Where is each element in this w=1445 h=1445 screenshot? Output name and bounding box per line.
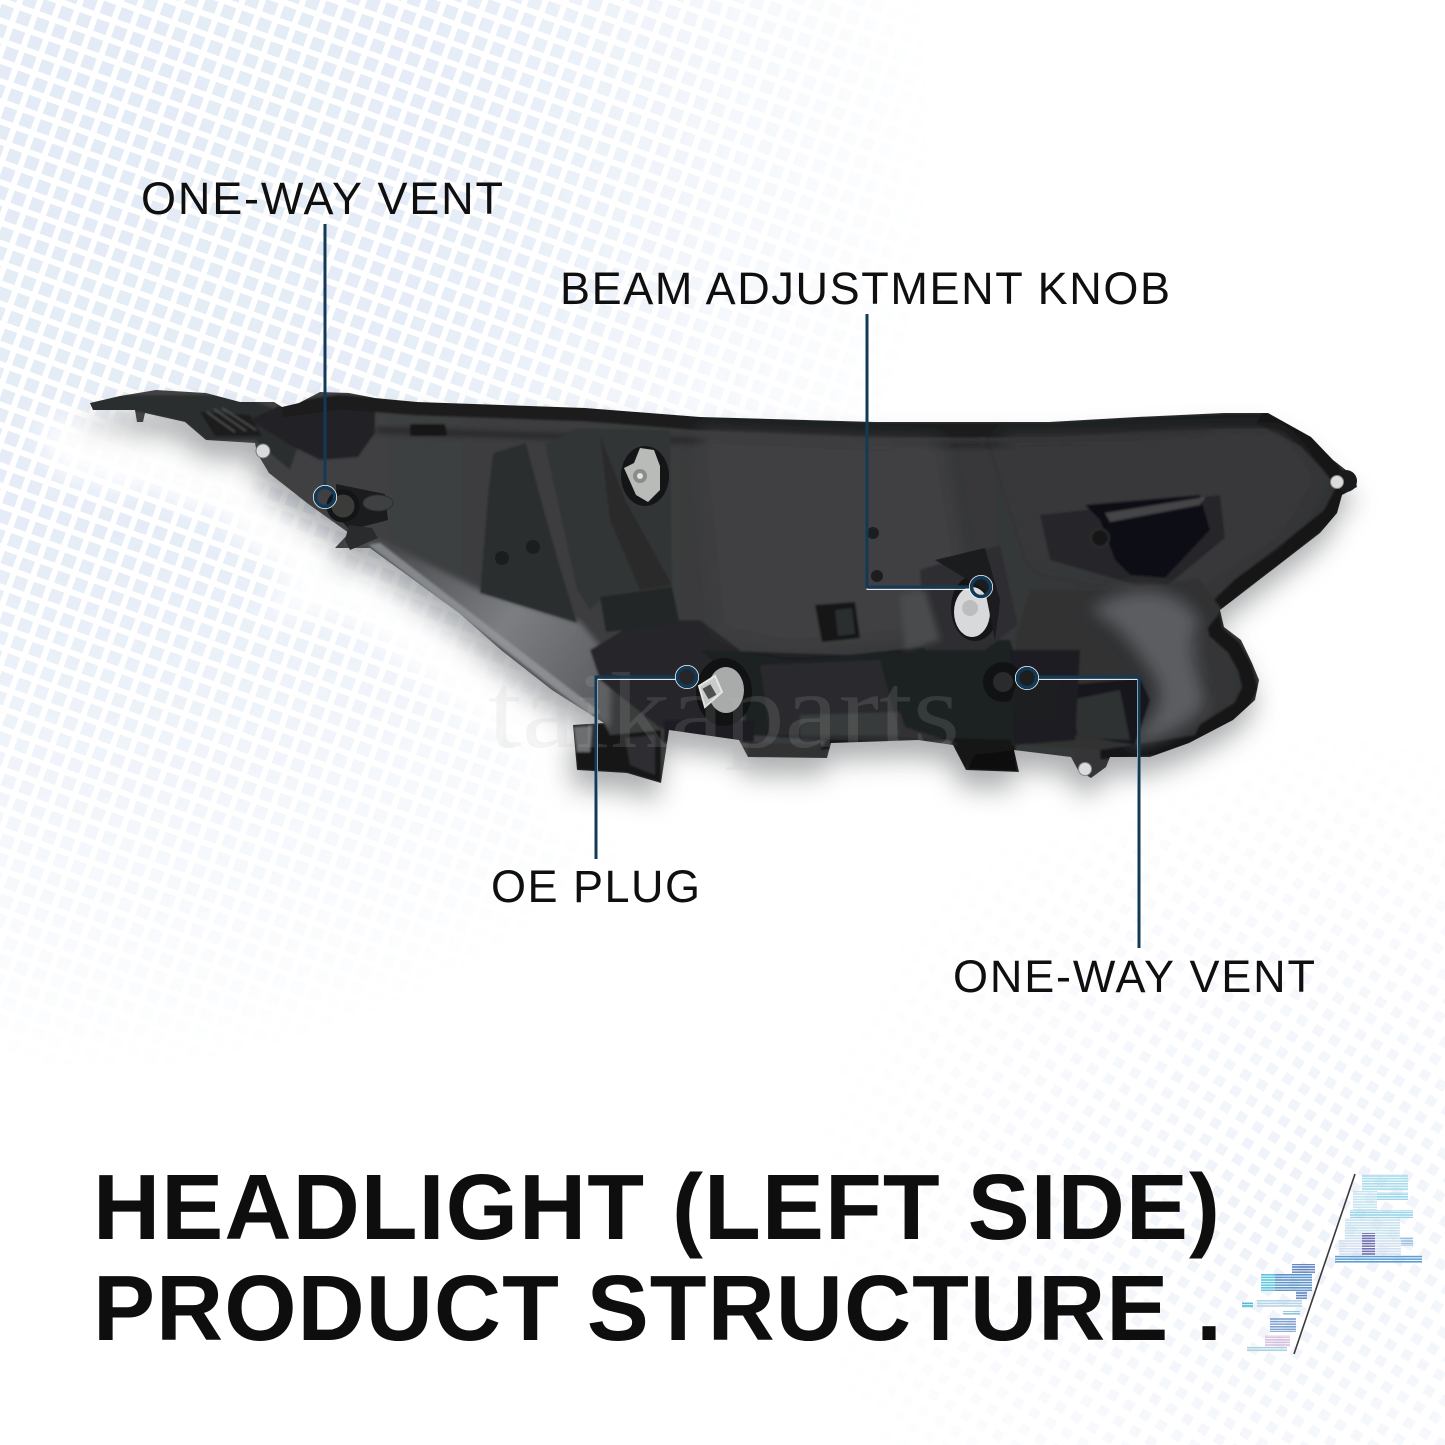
title: HEADLIGHT (LEFT SIDE): [93, 1155, 1220, 1259]
vent: lower right: [983, 662, 1060, 720]
icon: glitch slash decoration: [1242, 1174, 1422, 1354]
title: PRODUCT STRUCTURE .: [93, 1256, 1222, 1360]
callout: OE plug: [491, 666, 700, 912]
headlight product image: [72, 380, 1370, 825]
adjustment knob: [935, 548, 1000, 641]
label: beam adjustment knob: BEAM ADJUSTMENT KNOB: [560, 263, 1170, 314]
callout: beam adjustment knob: [560, 263, 1170, 598]
title: [93, 1155, 1222, 1360]
screw: bottom: [1078, 762, 1092, 776]
bulb cap: upper: [621, 446, 669, 506]
bumps on panel: [495, 527, 883, 582]
callout: upper one-way vent: [141, 173, 503, 508]
label: OE plug: OE PLUG: [491, 861, 700, 912]
screw: top left: [256, 444, 270, 458]
OE plug connector: [696, 658, 752, 726]
label: one-way vent: ONE-WAY VENT: [141, 173, 503, 224]
watermark: taikaparts: [488, 652, 960, 771]
label: one-way vent lower: ONE-WAY VENT: [953, 951, 1315, 1002]
callout: lower one-way vent: [953, 666, 1315, 1002]
screw: right: [1330, 470, 1357, 492]
vent: upper left cylinder: [329, 484, 393, 550]
